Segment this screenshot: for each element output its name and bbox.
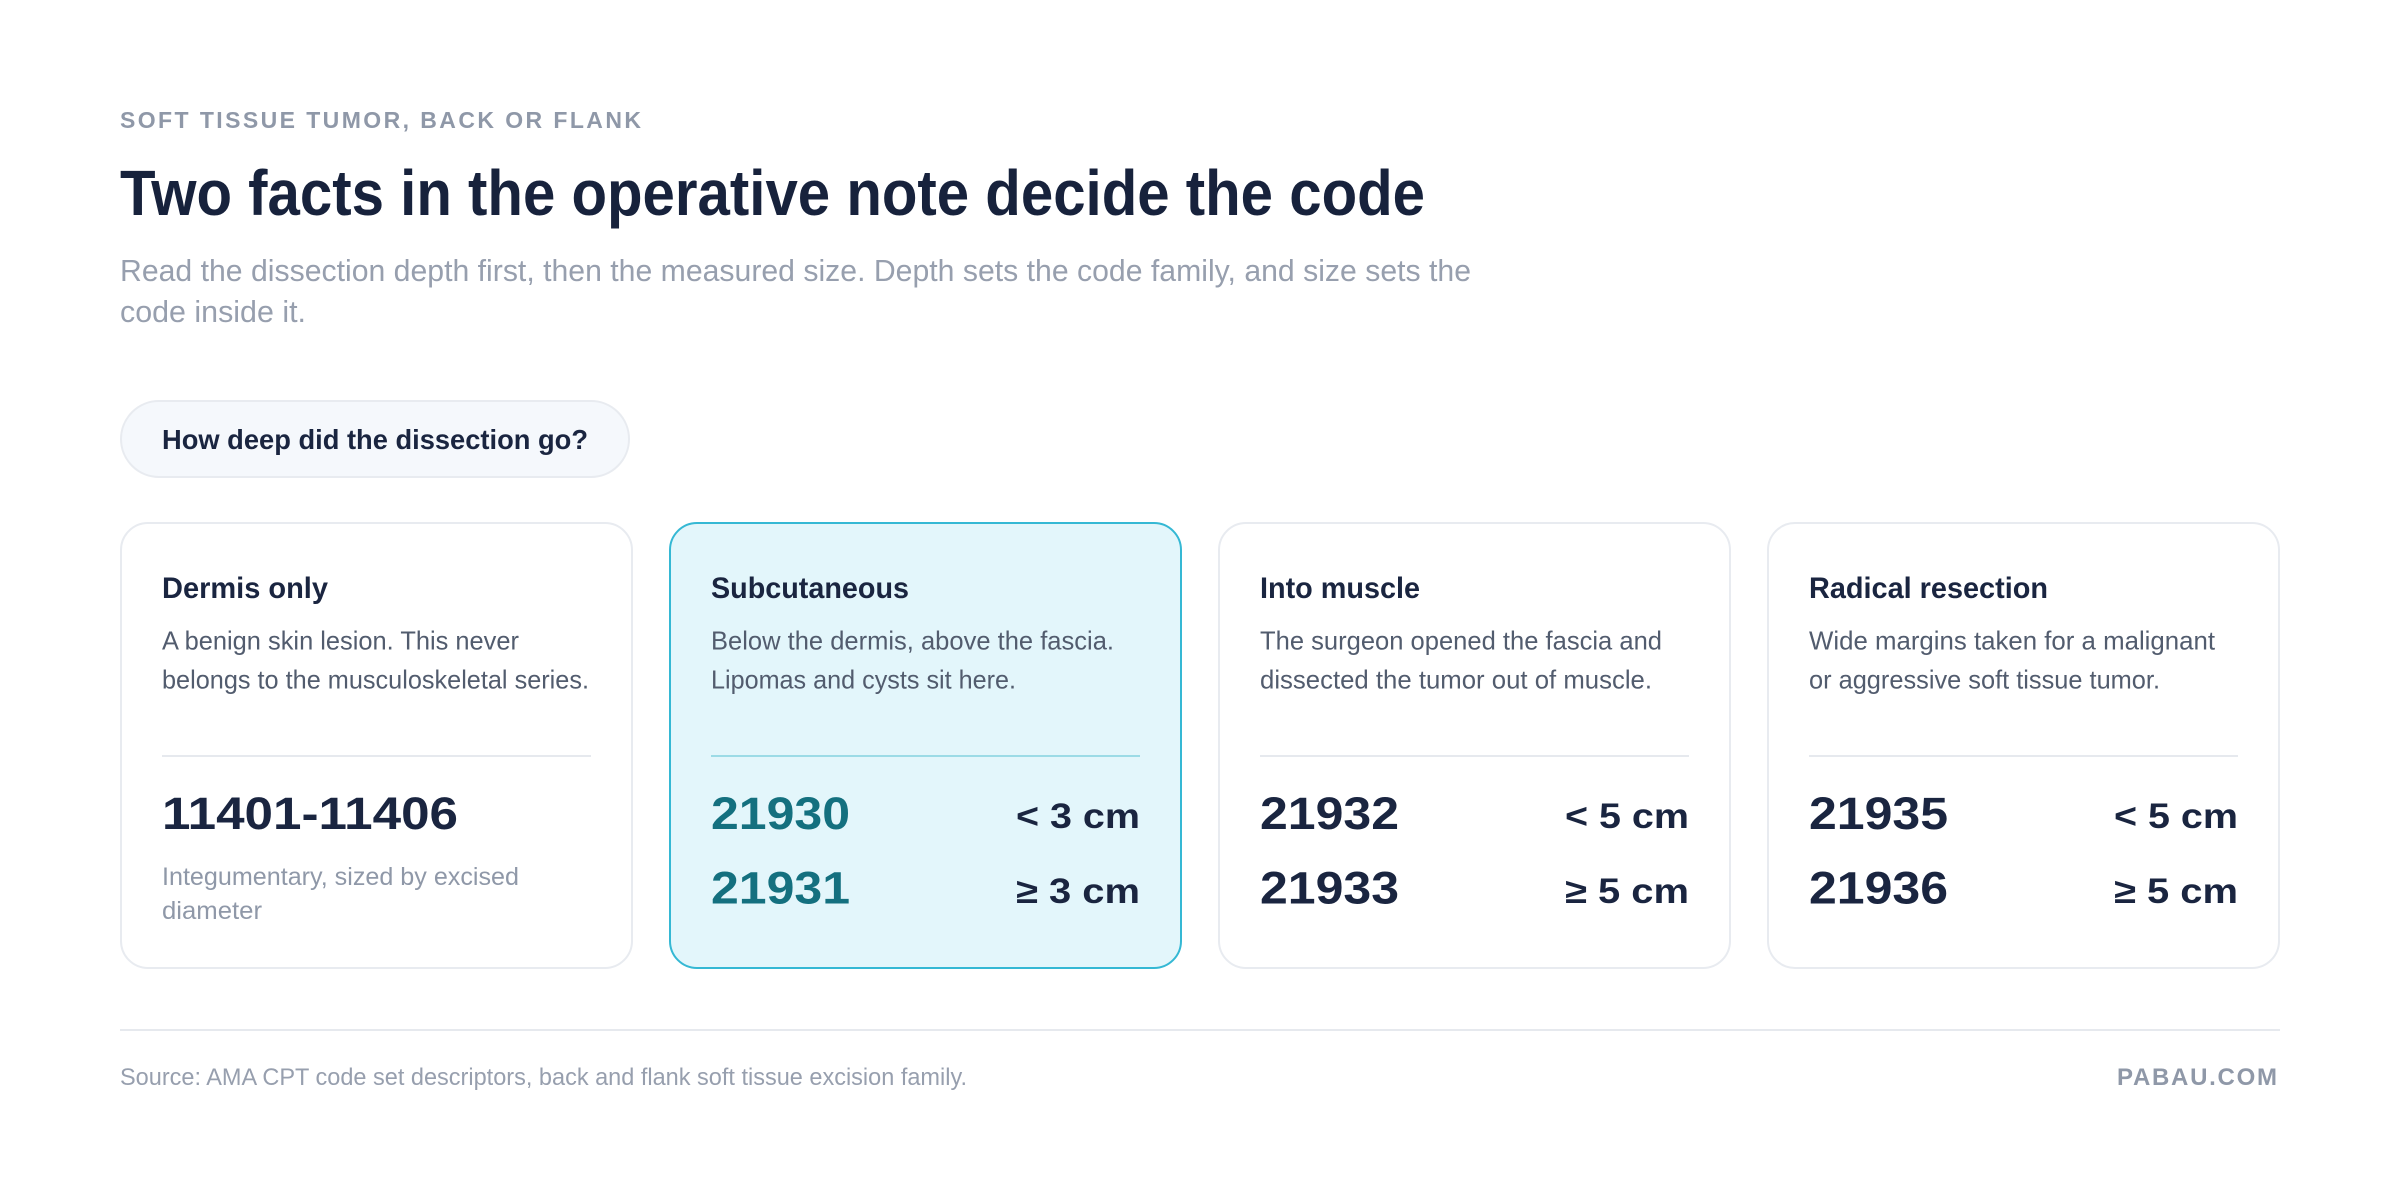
panel: subcutaneous (highlighted) — [670, 523, 1181, 968]
card description: into muscle: The surgeon opened the fascia and — [1260, 626, 1662, 656]
panel: radical resection — [1768, 523, 2279, 968]
code row: 21932: 21932 — [1260, 788, 1399, 839]
question pill: How deep did the dissection go? — [162, 424, 588, 455]
code row: 21933: ≥ 5 cm — [1565, 872, 1689, 911]
code row: 21933: 21933 — [1260, 862, 1399, 914]
code row: 21931: 21931 — [711, 862, 850, 914]
subtitle: code inside it. — [120, 294, 306, 329]
card title: subcutaneous: Subcutaneous — [711, 572, 909, 605]
card description: dermis only: A benign skin lesion. This never — [162, 626, 519, 656]
note: integumentary: diameter — [162, 897, 262, 925]
code row: 21935: < 5 cm — [2114, 797, 2238, 836]
code row: 21932: < 5 cm — [1565, 797, 1689, 836]
eyebrow: SOFT TISSUE TUMOR, BACK OR FLANK — [120, 107, 641, 133]
card description: into muscle: dissected the tumor out of muscle. — [1260, 664, 1652, 694]
note: integumentary — [162, 863, 519, 925]
code row: 21936 — [1809, 862, 2238, 914]
note: integumentary: Integumentary, sized by excised — [162, 863, 519, 891]
card description: radical resection: or aggressive soft tissue tumor. — [1809, 664, 2160, 694]
card description: radical resection — [1809, 626, 2216, 694]
subtitle: Read the dissection depth first, then the measured size. Depth sets the code family, and size sets the — [120, 253, 1471, 288]
code range: 11401-11406: 11401-11406 — [162, 788, 458, 839]
code row: 21931 — [711, 862, 1140, 914]
code row: 21933 — [1260, 862, 1689, 914]
question pill — [121, 401, 629, 477]
code row: 21935 — [1809, 788, 2238, 839]
card description: dermis only: belongs to the musculoskeletal series. — [162, 664, 589, 694]
card title: radical resection: Radical resection — [1809, 572, 2048, 605]
code row: 21936: 21936 — [1809, 862, 1948, 914]
card title: into muscle: Into muscle — [1260, 572, 1420, 605]
code row: 21930: 21930 — [711, 788, 850, 839]
brand: PABAU.COM — [2117, 1064, 2277, 1091]
card description: dermis only — [162, 626, 589, 694]
subtitle — [120, 253, 1471, 329]
title: Two facts in the operative note decide the code — [120, 157, 1425, 229]
code row: 21930: < 3 cm — [1016, 797, 1140, 836]
panel: into muscle — [1219, 523, 1730, 968]
card description: radical resection: Wide margins taken for a malignant — [1809, 626, 2216, 656]
code row: 21931: ≥ 3 cm — [1016, 872, 1140, 911]
card description: subcutaneous — [711, 626, 1114, 694]
card title: dermis only: Dermis only — [162, 572, 328, 605]
code row: 21936: ≥ 5 cm — [2114, 872, 2238, 911]
card description: subcutaneous: Lipomas and cysts sit here. — [711, 664, 1016, 694]
card description: into muscle — [1260, 626, 1662, 694]
panel: dermis only — [121, 523, 632, 968]
card description: subcutaneous: Below the dermis, above the fascia. — [711, 626, 1114, 656]
source note: Source: AMA CPT code set descriptors, back and flank soft tissue excision family. — [120, 1064, 967, 1091]
code row: 21935: 21935 — [1809, 788, 1948, 839]
code row: 21930 — [711, 788, 1140, 839]
code row: 21932 — [1260, 788, 1689, 839]
